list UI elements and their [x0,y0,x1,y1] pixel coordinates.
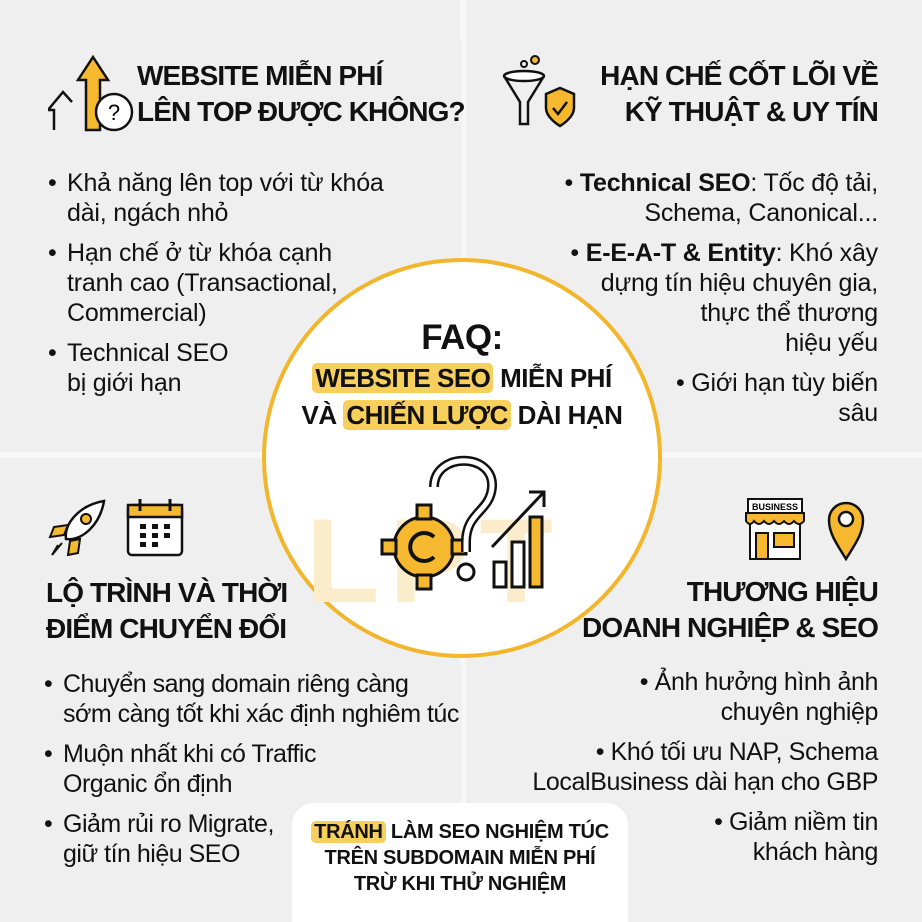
heading: DOANH NGHIỆP & SEO [582,612,878,643]
bullets: khách hàng [753,838,878,866]
bullets: Khả năng lên top với từ khóa [67,169,384,197]
bullets [49,169,384,397]
bullets: Commercial) [67,299,206,327]
panel: top-left [48,54,465,397]
bullets: Giảm rủi ro Migrate, [63,810,274,838]
icon: arrow up question: ? [108,100,120,125]
bullets: dựng tín hiệu chuyên gia, [601,269,878,297]
bullets: • Khó tối ưu NAP, Schema [596,738,878,766]
callout: bottom center: TRỪ KHI THỬ NGHIỆM [354,873,566,895]
callout: bottom center: TRÊN SUBDOMAIN MIỄN PHÍ [325,847,595,869]
bullets: Chuyển sang domain riêng càng [63,670,408,698]
bullets: LocalBusiness dài hạn cho GBP [532,768,878,796]
circle title: VÀ CHIẾN LƯỢC DÀI HẠN [302,400,622,430]
bullets: • E-E-A-T & Entity: Khó xây [570,239,878,267]
icon: rocket [48,500,106,556]
bullets: Technical SEO [67,339,228,367]
center circle [262,258,662,658]
icon: gear question chart [380,456,546,590]
bullets: thực thể thương [700,299,878,327]
icon: funnel shield [502,55,576,128]
heading [582,576,878,643]
bullets: hiệu yếu [785,329,878,357]
bullets: sâu [838,399,878,427]
panel: bottom-left [45,499,459,868]
bullets: sớm càng tốt khi xác định nghiêm túc [63,700,459,728]
bullets: Muộn nhất khi có Traffic [63,740,316,768]
heading: WEBSITE MIỄN PHÍ [137,60,382,91]
bullets [532,668,878,866]
bullets [564,169,878,427]
callout: bottom center: TRÁNH LÀM SEO NGHIỆM TÚC [314,821,609,843]
heading: HẠN CHẾ CỐT LÕI VỀ [600,60,878,91]
heading: LỘ TRÌNH VÀ THỜI [46,577,287,608]
circle title: WEBSITE SEO MIỄN PHÍ [315,363,612,393]
heading [46,577,287,644]
bullets: giữ tín hiệu SEO [63,840,240,868]
icon: business store [745,498,805,560]
heading: ĐIỂM CHUYỂN ĐỔI [46,613,286,644]
watermark: LPT [306,494,563,628]
heading: LÊN TOP ĐƯỢC KHÔNG? [137,96,465,127]
bullets: Hạn chế ở từ khóa cạnh [67,239,332,267]
bullets: dài, ngách nhỏ [67,199,228,227]
heading [600,60,878,127]
bullets: • Giảm niềm tin [714,808,878,836]
bullets: • Ảnh hưởng hình ảnh [640,668,878,696]
circle title [302,318,622,430]
panel: bottom-right [532,498,878,866]
callout: bottom center [292,803,628,922]
panel: top-right [502,55,878,427]
bullets: Schema, Canonical... [644,199,878,227]
heading: KỸ THUẬT & UY TÍN [625,96,878,127]
heading [137,60,465,127]
bullets: • Giới hạn tùy biến [676,369,878,397]
icon: business store: BUSINESS [752,502,798,512]
bullets: • Technical SEO: Tốc độ tải, [564,169,878,197]
heading: THƯƠNG HIỆU [687,576,878,607]
icon: calendar [126,499,184,556]
icon: arrow up question [48,54,134,132]
bullets: Organic ổn định [63,770,232,798]
bullets: bị giới hạn [67,369,181,397]
bullets [45,670,459,868]
icon: location pin [828,502,864,561]
circle title: FAQ: [421,318,503,357]
bullets: chuyên nghiệp [721,698,878,726]
bullets: tranh cao (Transactional, [67,269,338,297]
